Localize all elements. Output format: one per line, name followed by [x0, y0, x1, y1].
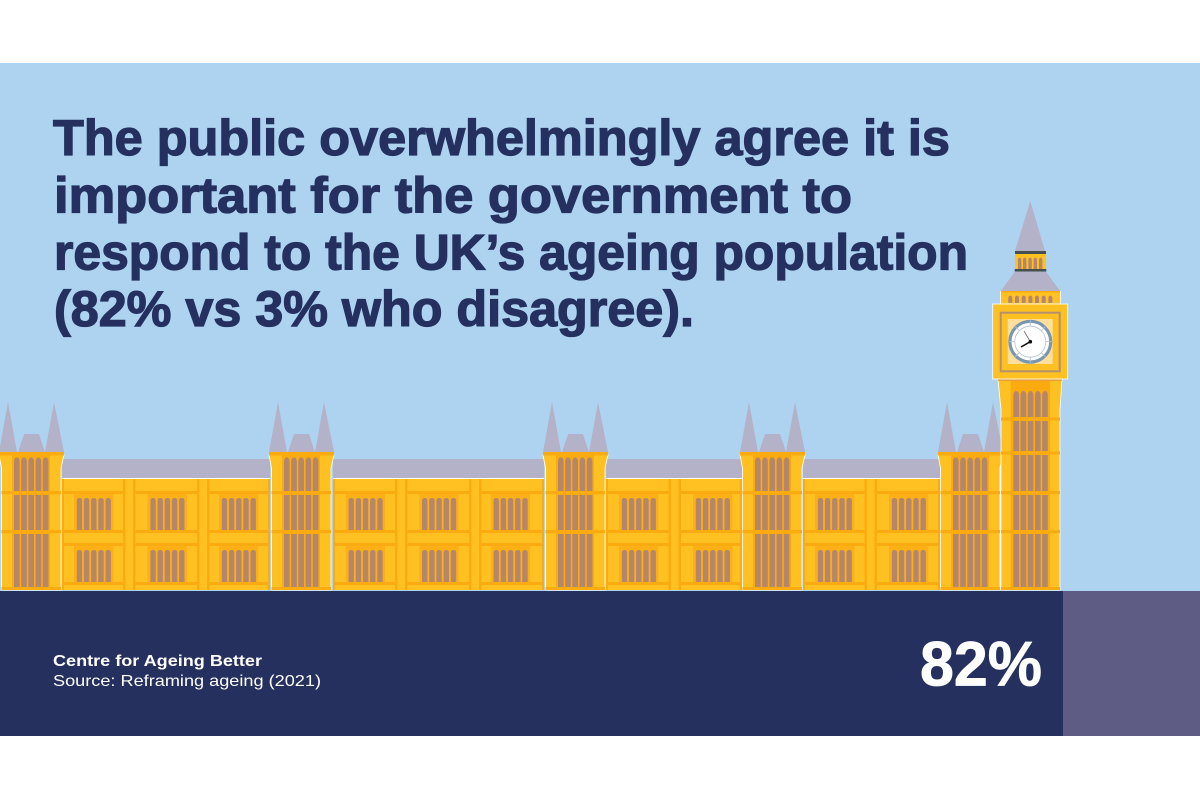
headline statistic: 82%	[920, 630, 1042, 700]
tower 5	[938, 402, 1003, 590]
footer accent block	[1063, 591, 1200, 736]
sky background	[0, 63, 1200, 593]
wing 2	[333, 459, 544, 650]
lantern	[1015, 251, 1046, 272]
tower 2	[269, 402, 334, 590]
source credit: Source: Reframing ageing (2021)	[53, 673, 321, 690]
title: respond to the UK’s ageing population	[54, 224, 968, 280]
belfry band	[1000, 291, 1060, 304]
wing 1	[62, 459, 270, 650]
clock case	[993, 304, 1068, 379]
source credit	[53, 653, 321, 690]
spire	[1015, 201, 1045, 251]
lower roof	[1001, 272, 1060, 291]
tower 4	[740, 402, 805, 590]
wing 4	[803, 459, 940, 650]
footer band	[0, 591, 1063, 736]
wing 3	[606, 459, 742, 650]
title	[53, 110, 968, 337]
illustration: Houses of Parliament	[0, 402, 1003, 650]
title: important for the government to	[54, 168, 852, 224]
source credit: Centre for Ageing Better	[53, 653, 262, 670]
clock face	[1009, 320, 1052, 363]
tower 1	[0, 402, 64, 590]
title: The public overwhelmingly agree it is	[53, 110, 950, 166]
shaft	[998, 379, 1062, 590]
title: (82% vs 3% who disagree).	[54, 281, 694, 337]
illustration: Big Ben	[993, 201, 1068, 590]
tower 3	[543, 402, 608, 590]
